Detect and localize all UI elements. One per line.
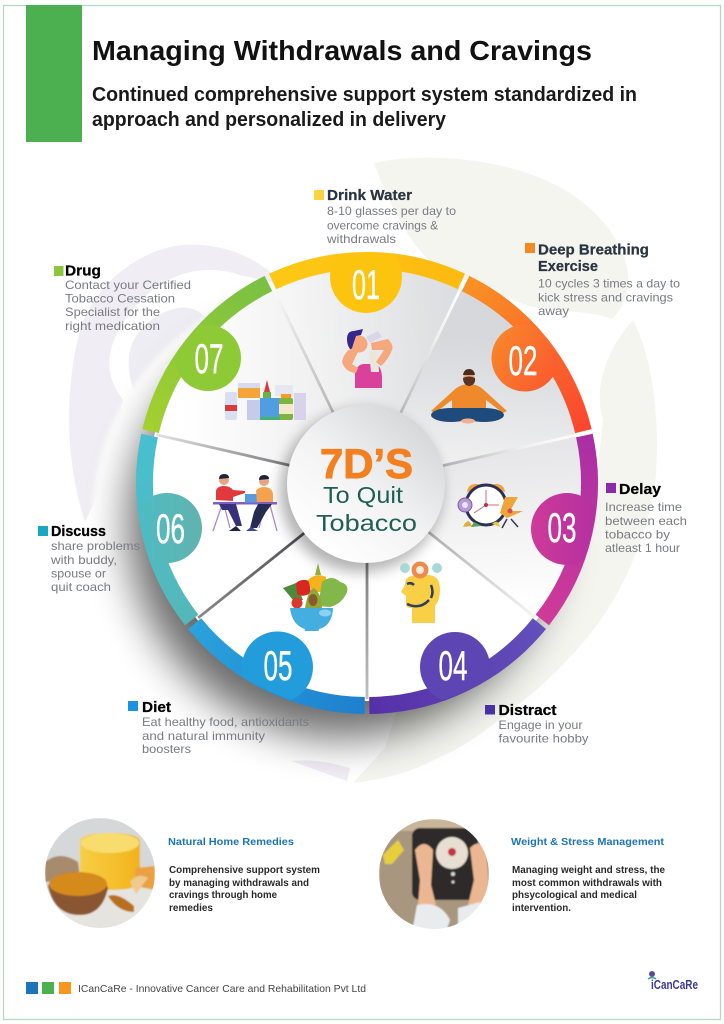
logo [648, 971, 698, 992]
hub subtitle line 1: To Quit [323, 482, 404, 508]
green header block [26, 5, 82, 142]
label: Drug: Tobacco Cessation [65, 292, 175, 306]
segment 07: green [151, 284, 268, 431]
label: Drug: Contact your Certified [65, 278, 191, 292]
segment 03: magenta [531, 436, 603, 620]
card text: Weight & Stress Management: Managing weight and stress, the [512, 865, 665, 876]
label: Distract: Engage in your [498, 718, 582, 732]
footer text: ICanCaRe - Innovative Cancer Care and Rehabilitation Pvt Ltd [78, 983, 366, 995]
seven-segment wheel [132, 241, 603, 706]
label: Diet: Diet [142, 700, 171, 716]
label: Discuss: Discuss [51, 524, 106, 540]
label: Deep Breathing Exercise: kick stress and cravings [538, 290, 673, 304]
label: Delay: tobacco by [605, 528, 670, 542]
card text: Weight & Stress Management [511, 836, 665, 914]
card text: Natural Home Remedies [168, 836, 320, 914]
hub title: 7D'S: 7D’S [320, 440, 413, 487]
card text: Weight & Stress Management: Weight & Stress Management [511, 836, 665, 848]
segment 03: magenta: 03 [548, 504, 576, 551]
wheel shadow [128, 310, 556, 738]
hub subtitle line 2: Tobacco [316, 510, 417, 536]
icon: bowl of vegetables [283, 563, 347, 631]
sector 01 background [273, 267, 461, 483]
label: Deep Breathing Exercise [525, 242, 680, 318]
label: Discuss: with buddy, [50, 553, 117, 567]
subtitle: Continued comprehensive support system standardized in [92, 84, 637, 106]
segment 07: green: 07 [194, 335, 224, 382]
card text: Natural Home Remedies: cravings through home [169, 890, 277, 901]
segment 02: orange [466, 284, 583, 431]
sector separators [156, 288, 578, 699]
label: Diet: and natural immunity [142, 729, 265, 743]
logo: iCanCaRe [651, 977, 698, 992]
icon: medicine bottles and packs [225, 380, 306, 420]
card text: Weight & Stress Management: phsycological and medical [512, 890, 637, 901]
label: Deep Breathing Exercise: Exercise [538, 259, 598, 275]
card text: Natural Home Remedies: Natural Home Remedies [168, 836, 294, 848]
label: Drug [54, 264, 191, 333]
photo: turmeric and golden jar [45, 818, 155, 930]
card text: Weight & Stress Management: most common withdrawals with [512, 878, 662, 889]
segment 06: teal [132, 436, 202, 620]
card text: Weight & Stress Management: intervention. [512, 903, 571, 914]
wheel base disc [149, 265, 585, 701]
subtitle [92, 84, 637, 131]
label: Drink Water: withdrawals [326, 232, 396, 246]
background leaf: beige upper [374, 158, 628, 319]
label: Deep Breathing Exercise: Deep Breathing [538, 242, 649, 258]
label: Deep Breathing Exercise: away [538, 304, 569, 318]
label: Deep Breathing Exercise: 10 cycles 3 times a day to [538, 276, 680, 290]
segment 04: indigo: 04 [438, 642, 468, 689]
label: Delay: between each [605, 514, 687, 528]
background leaf: lavender arc [69, 245, 285, 522]
icon: alarm clock [458, 484, 523, 528]
background leaf: lavender bottom [291, 760, 350, 781]
card text: Natural Home Remedies: remedies [169, 903, 213, 914]
label: Delay: atleast 1 hour [605, 541, 680, 555]
background leaf: lavender inner blob [129, 307, 210, 420]
label: Discuss: spouse or [51, 566, 106, 580]
sector 07 background [156, 288, 367, 483]
segment 04: indigo [369, 624, 539, 706]
label: Drink Water: overcome cravings & [327, 218, 438, 232]
segment 06: teal: 06 [156, 505, 185, 552]
center circle shadow [280, 410, 442, 572]
segment 05: blue: 05 [264, 642, 292, 689]
white glow behind the wheel [92, 282, 568, 758]
label: Diet [128, 700, 309, 756]
label: Diet: boosters [142, 742, 191, 756]
sector 03 background [367, 435, 583, 618]
segment 01: yellow [269, 252, 465, 313]
label: Drug: Drug [65, 264, 101, 280]
label: Drug: Specialist for the [65, 305, 160, 319]
label: Discuss: share problems [51, 539, 140, 553]
label: Drink Water: Drink Water [327, 188, 412, 204]
title: Managing Withdrawals and Cravings [92, 35, 592, 66]
segment 01: yellow: 01 [352, 261, 380, 308]
label: Delay: Increase time [605, 500, 682, 514]
label: Diet: Eat healthy food, antioxidants [142, 715, 309, 729]
icon: meditating man [431, 369, 507, 424]
segment 02: orange: 02 [508, 337, 538, 384]
label: Drug: right medication [65, 319, 160, 333]
label: Discuss [38, 524, 140, 594]
label: Drink Water: 8-10 glasses per day to [327, 204, 456, 218]
segment 05: blue [195, 624, 365, 706]
icon: woman drinking water [342, 329, 392, 388]
center hub [287, 405, 445, 563]
label: Distract: favourite hobby [498, 732, 588, 746]
card text: Natural Home Remedies: by managing withdrawals and [169, 878, 309, 889]
card text: Natural Home Remedies: Comprehensive support system [169, 865, 320, 876]
subtitle: approach and personalized in delivery [92, 109, 447, 131]
background leaf: beige right and bottom [353, 320, 657, 783]
label: Distract [485, 703, 588, 746]
label: Delay [605, 482, 687, 555]
icon: head with gear [400, 562, 442, 623]
footer squares [26, 982, 71, 994]
icon: two people at a table [213, 474, 277, 531]
label: Distract: Distract [498, 703, 557, 719]
sector 02 background [367, 288, 578, 483]
photo: feet on weighing scale [379, 819, 490, 932]
label: Discuss: quit coach [51, 580, 111, 594]
label: Delay: Delay [619, 482, 661, 498]
label: Drink Water [314, 188, 456, 246]
